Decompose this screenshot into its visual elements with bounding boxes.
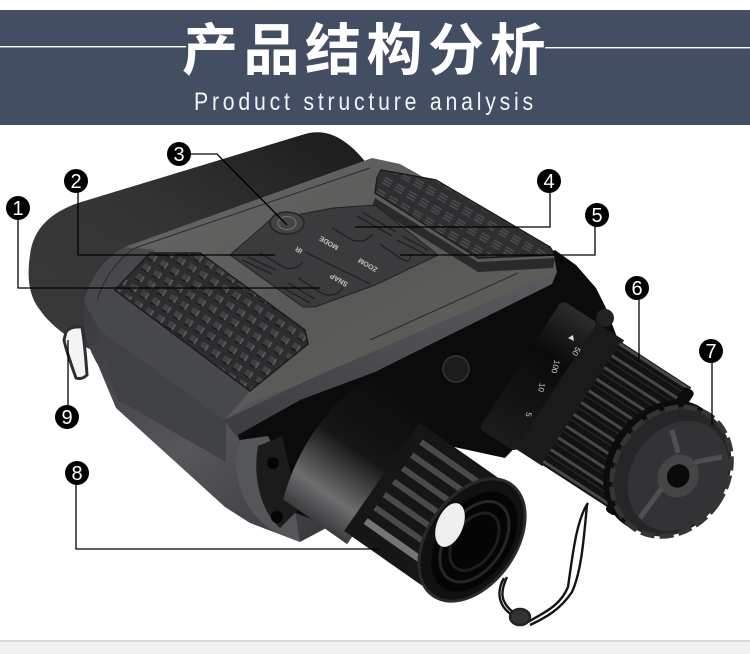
callout 2 xyxy=(64,169,275,255)
distance scale xyxy=(524,335,582,418)
right grip pad xyxy=(375,170,555,258)
lens cap xyxy=(579,378,750,561)
callout 4 xyxy=(355,169,561,227)
binocular device xyxy=(29,132,750,627)
left eyepiece tube xyxy=(272,369,551,627)
eyecup xyxy=(29,132,368,350)
button labels: MODE xyxy=(318,234,340,251)
callout 4: 4 xyxy=(543,171,555,193)
top plate xyxy=(84,158,557,420)
lens opening xyxy=(429,499,471,551)
button labels: SNAP xyxy=(329,271,349,287)
callout 8 xyxy=(65,461,380,549)
callout 6 xyxy=(625,276,649,362)
buttons xyxy=(242,212,428,303)
lanyard xyxy=(499,503,588,625)
strap ring xyxy=(64,327,87,379)
callout 9: 9 xyxy=(61,407,73,429)
callout 6: 6 xyxy=(631,278,643,300)
header banner xyxy=(0,10,750,125)
side inset panel xyxy=(98,318,226,462)
dark channel beside right pad xyxy=(372,198,555,272)
lower band xyxy=(224,272,557,436)
callout 1 xyxy=(6,196,320,288)
power button xyxy=(270,212,304,234)
footer strip xyxy=(0,640,750,654)
callout 3 xyxy=(167,142,287,225)
callout 7: 7 xyxy=(705,341,717,363)
distance scale: 5 xyxy=(524,411,533,418)
right objective tube xyxy=(479,300,698,517)
callout 1: 1 xyxy=(12,198,24,220)
callout 5: 5 xyxy=(591,205,603,227)
button panel xyxy=(230,205,438,307)
callout 2: 2 xyxy=(70,171,82,193)
callout 7 xyxy=(699,339,723,425)
callout 5 xyxy=(400,203,609,255)
button labels: IR xyxy=(294,245,304,254)
distance scale: 100 xyxy=(549,359,561,375)
distance scale: 50 xyxy=(570,345,582,358)
callout 8: 8 xyxy=(71,463,83,485)
subtitle: Product structure analysis xyxy=(194,87,533,115)
rear strap post xyxy=(596,309,614,327)
title: 产品结构分析 xyxy=(182,19,551,82)
edge seam xyxy=(97,168,518,340)
rear flange with screws xyxy=(236,436,300,542)
dark left shell xyxy=(84,247,250,420)
body side xyxy=(84,290,360,542)
distance scale: 10 xyxy=(536,382,547,393)
callout 9 xyxy=(55,340,79,429)
button labels xyxy=(294,234,379,287)
callout 3: 3 xyxy=(173,144,185,166)
cap spokes xyxy=(640,430,722,518)
front socket xyxy=(443,356,469,382)
shoulder and front face xyxy=(232,250,620,530)
left grip pad xyxy=(115,253,308,391)
button labels: ZOOM xyxy=(357,256,379,273)
